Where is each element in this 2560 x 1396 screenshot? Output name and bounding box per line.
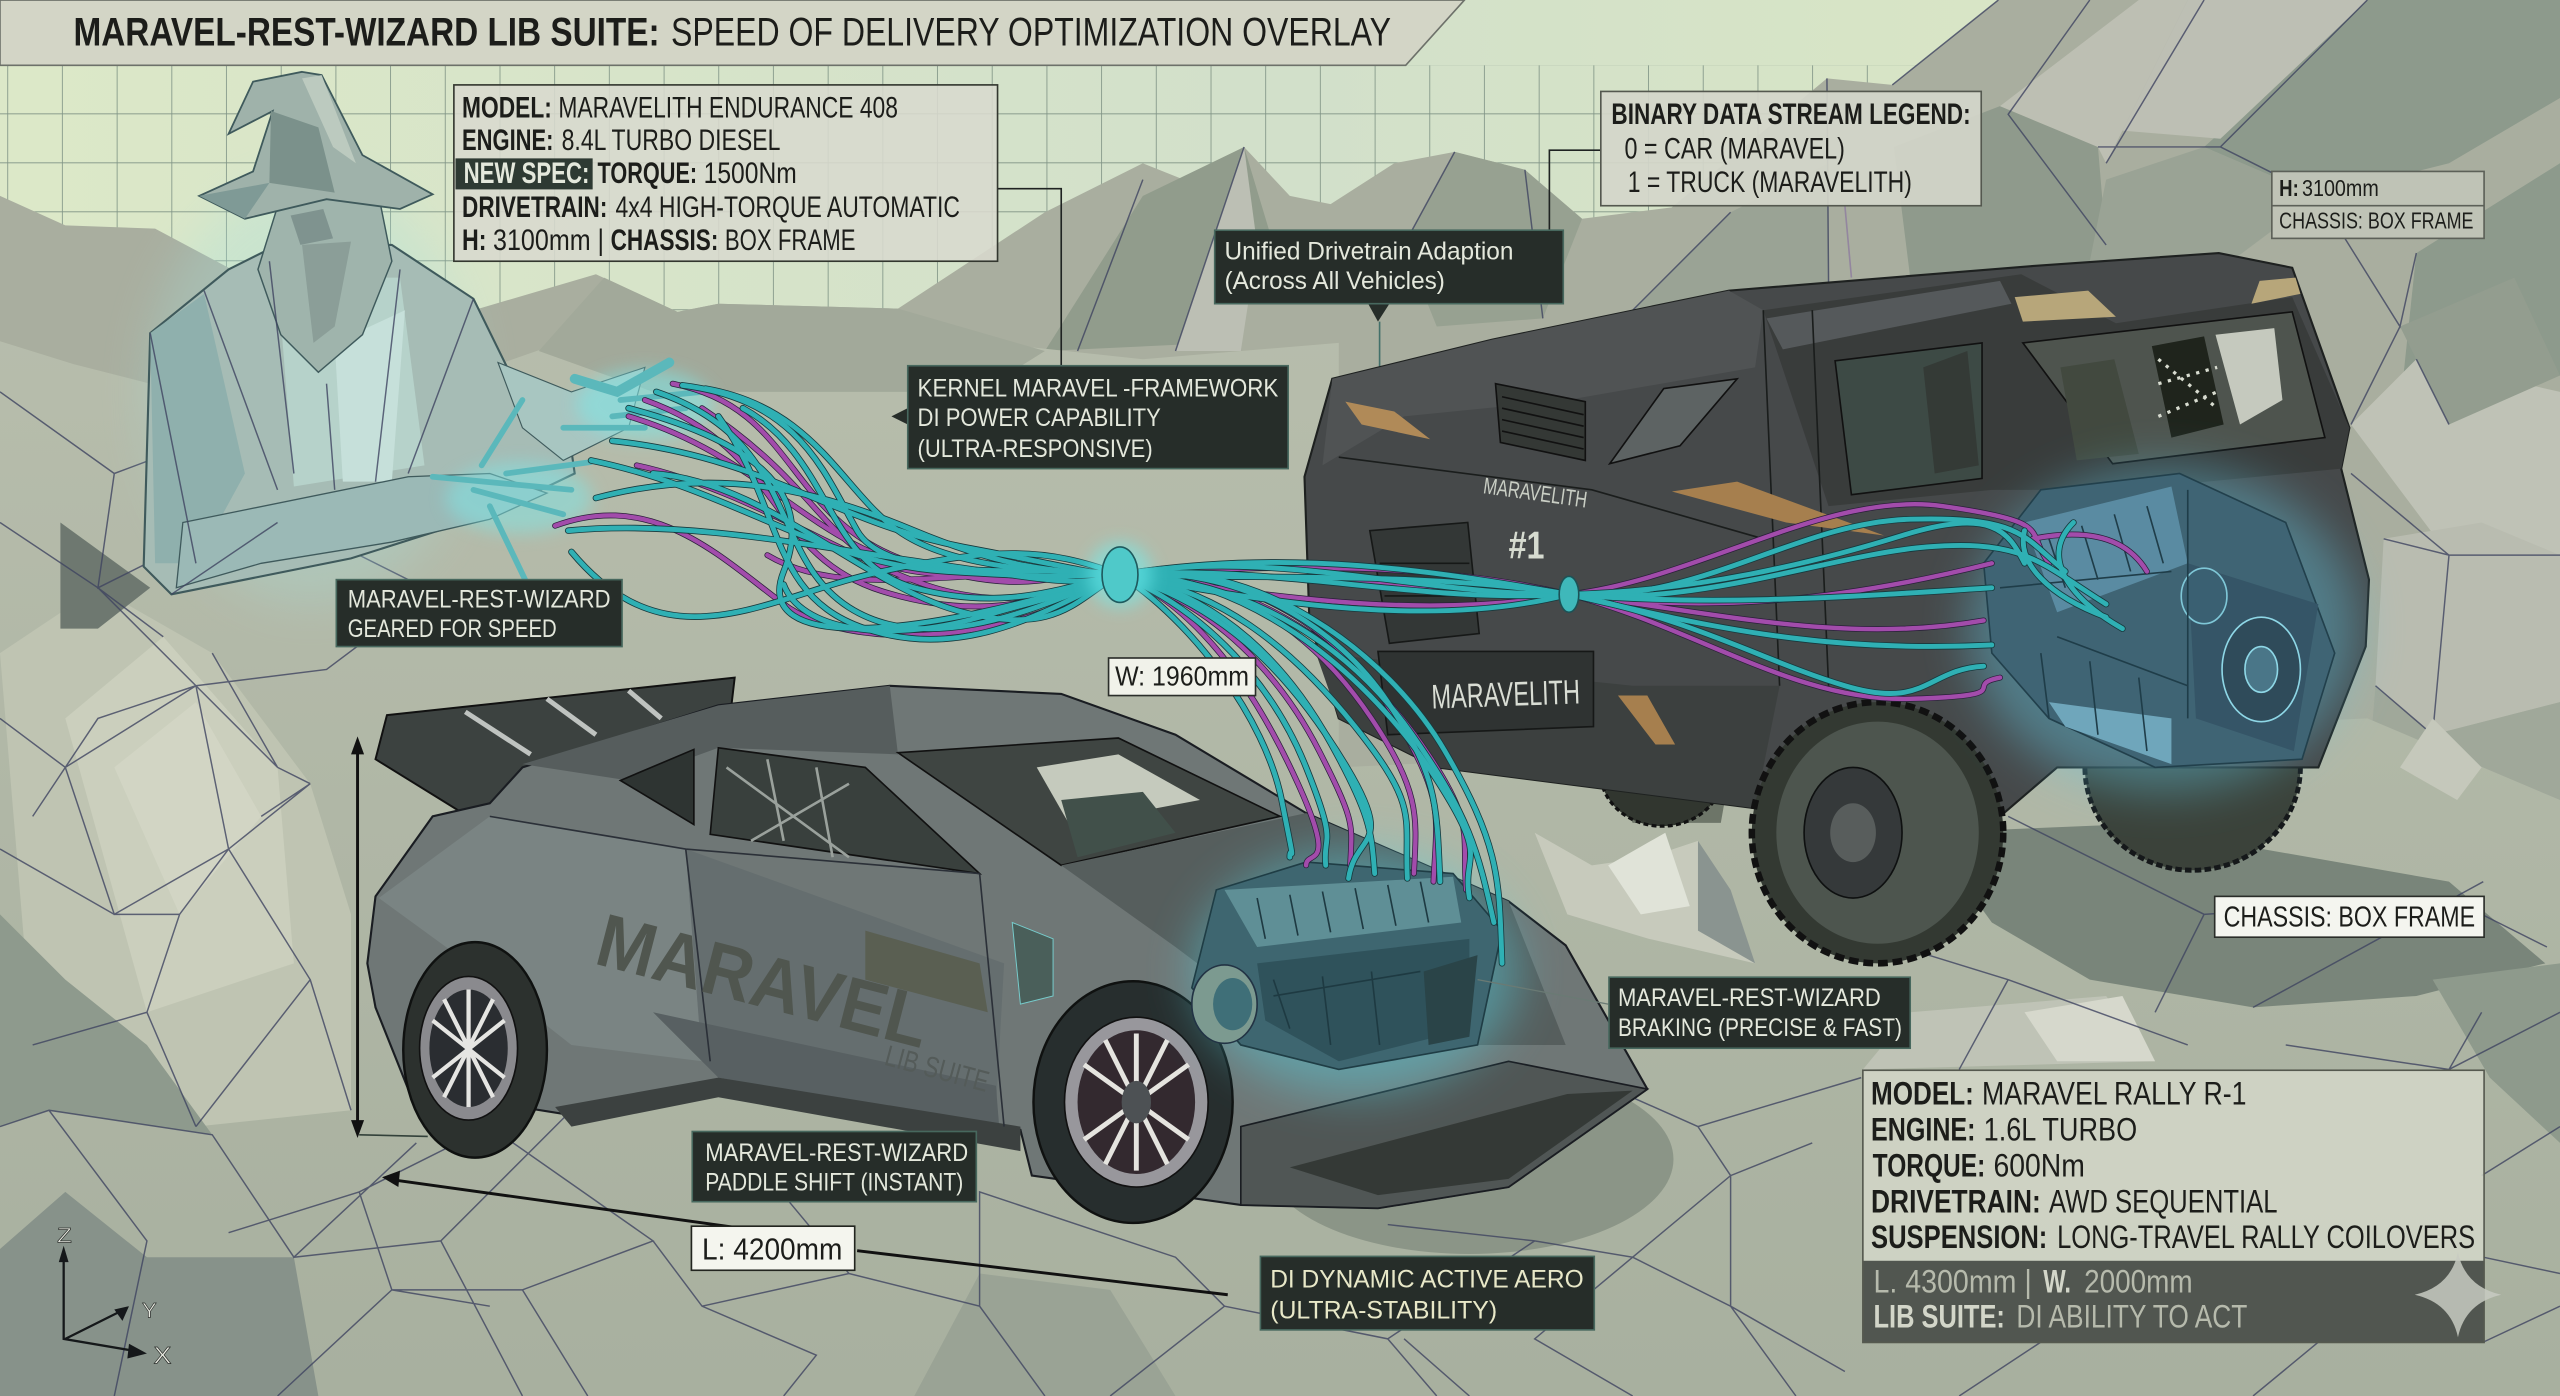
- panel: Maravelith specifications: 3100mm |: [493, 224, 604, 257]
- wizard hands: [433, 362, 702, 591]
- callout: paddle shift: [692, 1131, 976, 1202]
- panel: Maravelith specifications: MARAVELITH ENDURANCE 408: [558, 92, 898, 125]
- panel: Maravelith specifications: BOX FRAME: [725, 224, 856, 257]
- panel: Maravelith specifications: 4x4 HIGH-TORQUE AUTOMATIC: [616, 191, 960, 224]
- title banner: MARAVEL-REST-WIZARD LIB SUITE:: [73, 11, 660, 55]
- panel: Maravel Rally R-1 specifications: DRIVETRAIN:: [1871, 1182, 2041, 1219]
- callout: dynamic active aero: [1260, 1256, 1594, 1330]
- dimension label: width: W: 1960mm: [1115, 661, 1249, 692]
- icon: XYZ axis gizmo: X: [153, 1342, 171, 1369]
- panel: Maravelith specifications: DRIVETRAIN:: [462, 191, 607, 224]
- callout: dynamic active aero: DI DYNAMIC ACTIVE AERO: [1270, 1265, 1584, 1293]
- truck wordmark: side lettering: MARAVELITH: [1482, 472, 1589, 513]
- title banner: [0, 0, 1464, 65]
- panel: Maravelith specifications: 1500Nm: [704, 157, 797, 190]
- callout: kernel framework: DI POWER CAPABILITY: [918, 404, 1161, 432]
- panel: Maravelith specifications: TORQUE:: [598, 157, 697, 190]
- panel: Maravelith specifications: 8.4L TURBO DIESEL: [562, 124, 780, 157]
- panel: Maravelith specifications: ENGINE:: [462, 124, 553, 157]
- panel: Maravel Rally R-1 specifications: 1.6L TURBO: [1984, 1110, 2137, 1147]
- callout: chassis box frame: [2215, 896, 2484, 937]
- panel: Maravel Rally R-1 specifications: 2000mm: [2084, 1262, 2193, 1299]
- truck number: #1: [1509, 524, 1544, 567]
- callout: geared for speed: [336, 580, 622, 647]
- background: mountain range: [0, 0, 2560, 816]
- car wordmark: MARAVEL: [589, 897, 938, 1064]
- cable knot: truck junction: [1559, 576, 1579, 612]
- callout: unified drivetrain adaption: [1215, 230, 1563, 322]
- panel: Maravel Rally R-1 specifications: AWD SEQUENTIAL: [2049, 1182, 2278, 1219]
- icon: XYZ axis gizmo: Y: [142, 1300, 157, 1323]
- truck engine hologram: [1967, 465, 2359, 792]
- panel: binary data stream legend: BINARY DATA STREAM LEGEND:: [1611, 98, 1971, 131]
- panel: Maravelith specifications: CHASSIS:: [611, 224, 718, 257]
- cable knot: wizard junction: [1087, 542, 1153, 607]
- callout: truck height and chassis: [2272, 171, 2484, 238]
- panel: Maravelith specifications: MODEL:: [462, 92, 552, 125]
- title banner: SPEED OF DELIVERY OPTIMIZATION OVERLAY: [671, 11, 1391, 55]
- icon: four-point sparkle: [2415, 1252, 2501, 1337]
- callout: dynamic active aero: (ULTRA-STABILITY): [1270, 1296, 1497, 1324]
- illustration: data cable bundle: [555, 384, 2147, 963]
- panel: Maravel Rally R-1 specifications: MODEL:: [1871, 1075, 1974, 1112]
- callout: braking: MARAVEL-REST-WIZARD: [1618, 984, 1881, 1012]
- icon: XYZ axis gizmo: Z: [57, 1225, 72, 1248]
- callout: paddle shift: PADDLE SHIFT (INSTANT): [705, 1168, 963, 1196]
- callout: kernel framework: [891, 366, 1288, 469]
- callout: unified drivetrain adaption: (Across All Vehicles): [1224, 267, 1445, 295]
- panel: Maravel Rally R-1 specifications: L. 4300mm |: [1873, 1262, 2032, 1299]
- panel: Maravel Rally R-1 specifications: LIB SUITE:: [1873, 1297, 2005, 1334]
- car engine hologram: [1192, 849, 1518, 1094]
- panel: Maravelith specifications: NEW SPEC:: [464, 157, 589, 190]
- callout: unified drivetrain adaption: Unified Drivetrain Adaption: [1224, 238, 1513, 266]
- callout: geared for speed: MARAVEL-REST-WIZARD: [348, 585, 611, 613]
- dimension label: length: [691, 1226, 855, 1270]
- panel: Maravel Rally R-1 specifications: TORQUE:: [1873, 1146, 1985, 1183]
- panel: Maravelith specifications: [454, 85, 998, 261]
- car sub-wordmark: LIB SUITE: [881, 1039, 993, 1099]
- callout: braking: BRAKING (PRECISE & FAST): [1618, 1014, 1902, 1042]
- illustration: Maravelith truck: [1304, 253, 2369, 963]
- panel: Maravel Rally R-1 specifications: ENGINE:: [1871, 1110, 1976, 1147]
- illustration: low-poly wizard hologram: [144, 72, 713, 604]
- car rear wheel: [403, 942, 547, 1158]
- panel: Maravelith specifications: H:: [462, 224, 487, 257]
- panel: Maravel Rally R-1 specifications: SUSPENSION:: [1871, 1218, 2047, 1255]
- panel: Maravel Rally R-1 specifications: DI ABILITY TO ACT: [2016, 1297, 2247, 1334]
- panel: binary data stream legend: 0 = CAR (MARAVEL): [1624, 132, 1845, 165]
- truck front wheel: [1752, 702, 2003, 963]
- connector lines from callouts: [998, 150, 1851, 563]
- panel: Maravel Rally R-1 specifications: [1863, 1070, 2484, 1342]
- car front wheel: [1033, 981, 1233, 1223]
- callout: geared for speed: GEARED FOR SPEED: [348, 615, 557, 643]
- panel: binary data stream legend: 1 = TRUCK (MARAVELITH): [1628, 166, 1912, 199]
- callout: chassis box frame: CHASSIS: BOX FRAME: [2224, 902, 2475, 934]
- arrow: car length dimension: [382, 1171, 1228, 1295]
- panel: Maravel Rally R-1 specifications: W.: [2043, 1262, 2071, 1299]
- panel: Maravel Rally R-1 specifications: MARAVEL RALLY R-1: [1982, 1075, 2247, 1112]
- icon: XYZ axis gizmo: [57, 1225, 171, 1369]
- callout: kernel framework: KERNEL MARAVEL -FRAMEWORK: [918, 375, 1279, 403]
- callout: truck height and chassis: H:: [2279, 175, 2299, 201]
- dimension label: length: L: 4200mm: [702, 1234, 842, 1267]
- panel: Maravel Rally R-1 specifications: 600Nm: [1993, 1146, 2085, 1183]
- callout: braking: [1478, 977, 1910, 1048]
- arrow: car height dimension: [351, 736, 428, 1138]
- truck wordmark: MARAVELITH door plate: MARAVELITH: [1431, 673, 1581, 717]
- callout: truck height and chassis: 3100mm: [2302, 175, 2379, 201]
- callout: paddle shift: MARAVEL-REST-WIZARD: [705, 1139, 968, 1167]
- callout: kernel framework: (ULTRA-RESPONSIVE): [918, 435, 1153, 463]
- panel: binary data stream legend: [1601, 91, 1981, 206]
- illustration: Maravel rally car: [367, 678, 1647, 1223]
- callout: truck height and chassis: CHASSIS: BOX FRAME: [2279, 208, 2473, 234]
